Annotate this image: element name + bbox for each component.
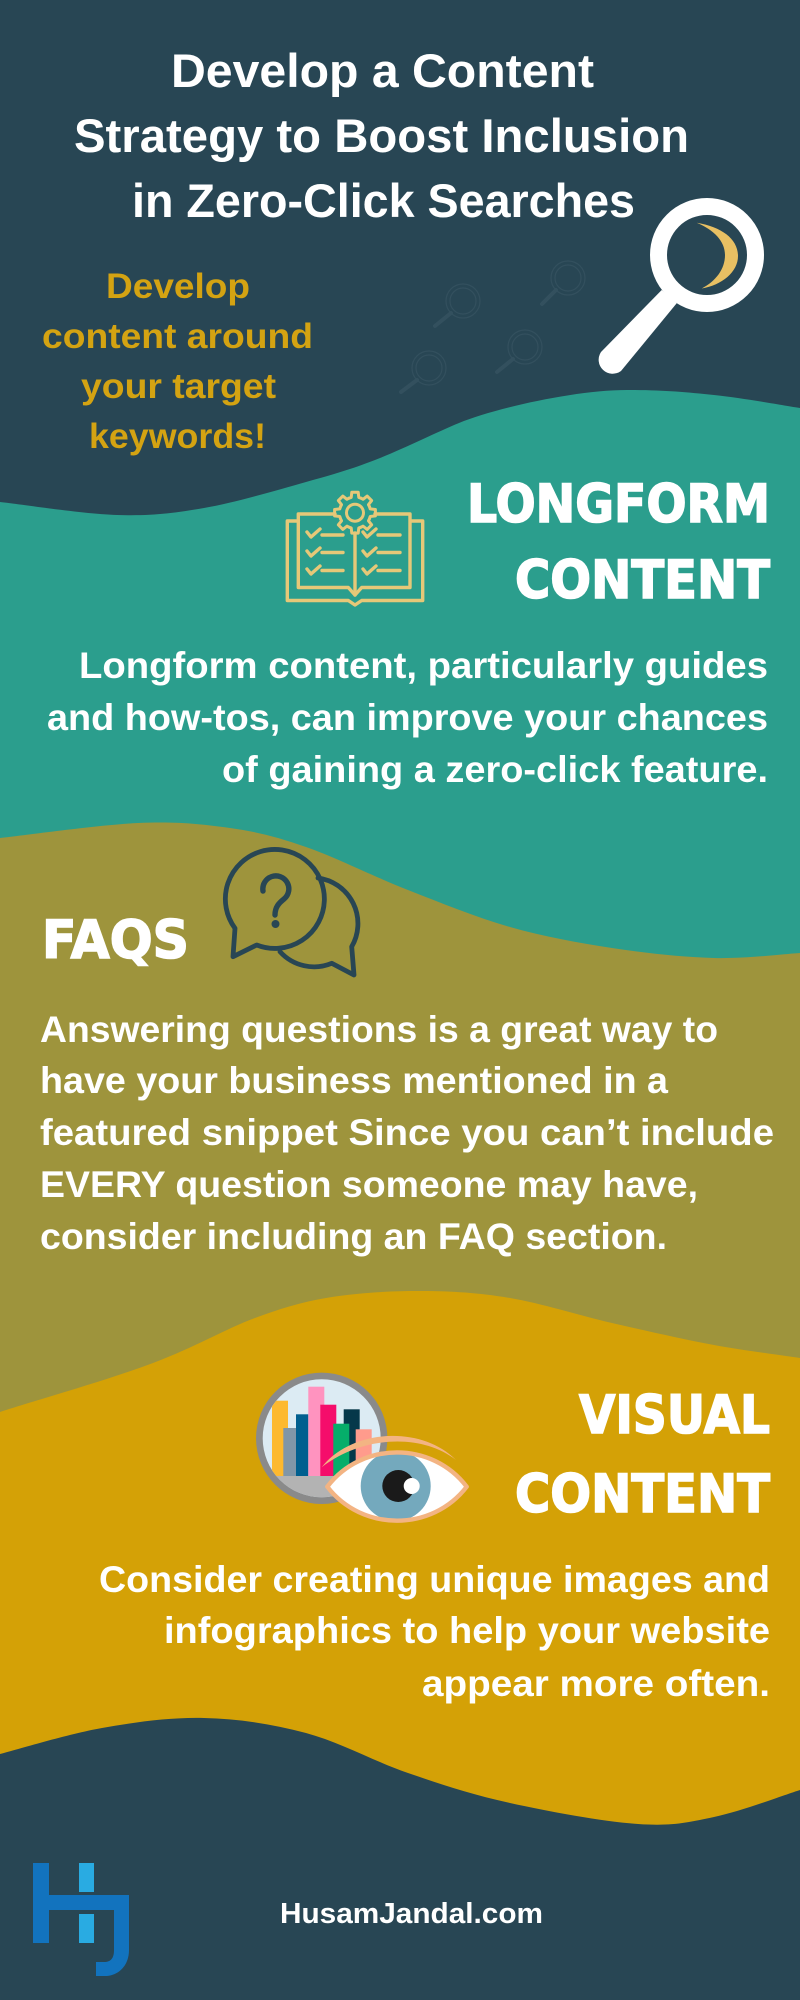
title: in Zero-Click Searches [132, 174, 635, 227]
text block: faqs description: EVERY question someone may have, [40, 1164, 698, 1205]
text block: longform description [47, 645, 768, 790]
icon: speech bubbles with question mark [225, 849, 358, 975]
title: Develop a Content [171, 44, 594, 97]
panel: header [0, 0, 800, 520]
heading: longform content [467, 474, 770, 611]
title [74, 44, 689, 227]
icon: eye [322, 1436, 467, 1521]
panel: visual content [0, 1291, 800, 1830]
text block: faqs description: consider including an FAQ section. [40, 1216, 667, 1257]
text block: longform description: Longform content, particularly guides [79, 645, 768, 686]
heading: longform content: LONGFORM [467, 474, 770, 535]
icon: open book with gear [287, 492, 423, 605]
panel: longform content [0, 390, 800, 960]
panel: faqs [0, 822, 800, 1415]
text block: faqs description [40, 1009, 774, 1257]
logo: HJ monogram [33, 1863, 129, 1976]
text block: longform description: and how-tos, can improve your chances [47, 697, 768, 738]
icon: bar chart in circle [256, 1372, 388, 1504]
heading: longform content: CONTENT [515, 550, 770, 611]
icon: faint small magnifiers [401, 261, 585, 392]
text block: visual description: appear more often. [422, 1663, 770, 1704]
text block: visual description [99, 1559, 770, 1704]
callout: develop content around keywords: your target [81, 367, 276, 406]
text block: faqs description: Answering questions is a great way to [40, 1009, 718, 1050]
icon: large magnifying glass [599, 206, 756, 374]
text block: visual description: infographics to help your website [164, 1610, 770, 1651]
callout: develop content around keywords: keywords! [89, 417, 266, 456]
text block: faqs description: have your business mentioned in a [40, 1060, 668, 1101]
title: Strategy to Boost Inclusion [74, 109, 689, 162]
callout: develop content around keywords: Develop [106, 267, 250, 306]
callout: develop content around keywords: content around [42, 317, 313, 356]
panel: footer [0, 1718, 800, 2000]
heading: faqs: FAQS [42, 910, 189, 971]
callout: develop content around keywords [42, 267, 313, 456]
heading: visual content: VISUAL [579, 1385, 770, 1446]
text block: longform description: of gaining a zero-click feature. [222, 749, 768, 790]
heading: visual content [515, 1385, 770, 1525]
text block: faqs description: featured snippet Since you can’t include [40, 1112, 774, 1153]
heading: visual content: CONTENT [515, 1464, 770, 1525]
text block: visual description: Consider creating unique images and [99, 1559, 770, 1600]
website url: HusamJandal.com [280, 1898, 543, 1930]
